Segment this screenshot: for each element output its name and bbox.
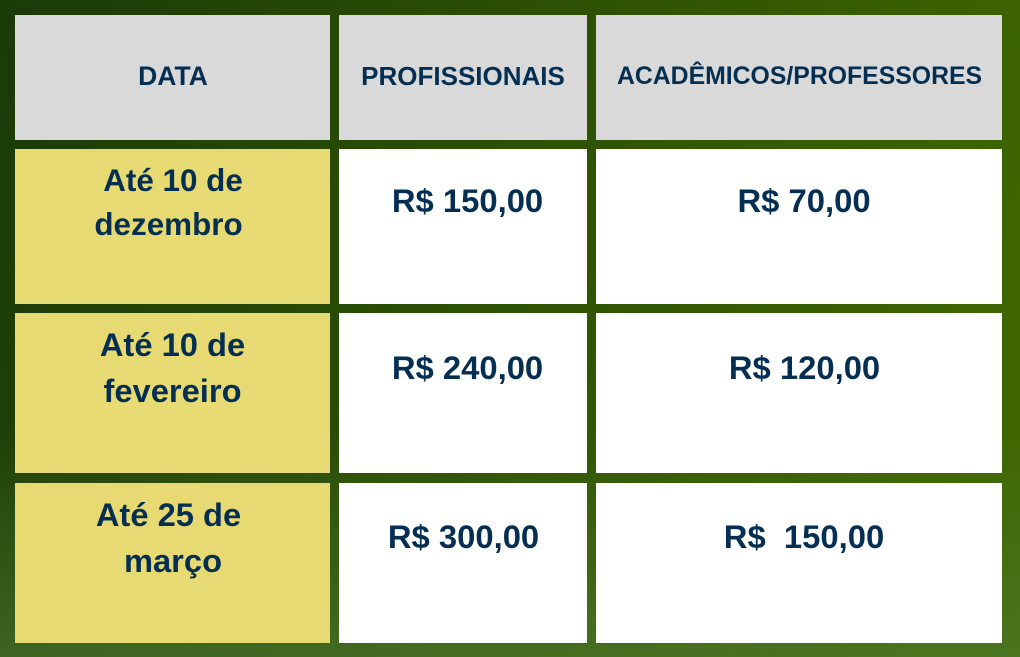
date cell: até 25 de março: Até 25 de: [96, 496, 241, 533]
header cell: profissionais: PROFISSIONAIS: [361, 60, 565, 90]
price cell: profissionais fevereiro: R$ 240,00: [392, 349, 543, 386]
price cell: profissionais dezembro: R$ 150,00: [392, 182, 543, 219]
header cell: acadêmicos/professores: ACADÊMICOS/PROFESSORES: [617, 63, 982, 90]
price cell: acadêmicos março: [596, 483, 1002, 643]
price cell: profissionais março: [339, 483, 587, 643]
price cell: acadêmicos fevereiro: [596, 313, 1002, 473]
price cell: profissionais fevereiro: [339, 313, 587, 473]
date cell: até 10 de dezembro: Até 10 de: [103, 163, 243, 198]
header cell: acadêmicos/professores: [596, 15, 1002, 140]
date cell: até 25 de março: março: [124, 542, 222, 579]
price cell: profissionais dezembro: [339, 149, 587, 304]
date cell: até 10 de fevereiro: fevereiro: [103, 372, 242, 409]
header cell: data: DATA: [138, 61, 208, 91]
header cell: profissionais: [339, 15, 587, 140]
date cell: até 10 de fevereiro: [15, 313, 330, 473]
date cell: até 25 de março: [15, 483, 330, 643]
price cell: acadêmicos dezembro: [596, 149, 1002, 304]
header cell: data: [15, 15, 330, 140]
date cell: até 10 de fevereiro: Até 10 de: [100, 326, 245, 363]
price cell: acadêmicos fevereiro: R$ 120,00: [729, 349, 880, 386]
price cell: profissionais março: R$ 300,00: [388, 518, 539, 555]
price cell: acadêmicos dezembro: R$ 70,00: [737, 182, 871, 219]
date cell: até 10 de dezembro: dezembro: [94, 207, 243, 242]
date cell: até 10 de dezembro: [15, 149, 330, 304]
price cell: acadêmicos março: R$ 150,00: [724, 518, 884, 555]
